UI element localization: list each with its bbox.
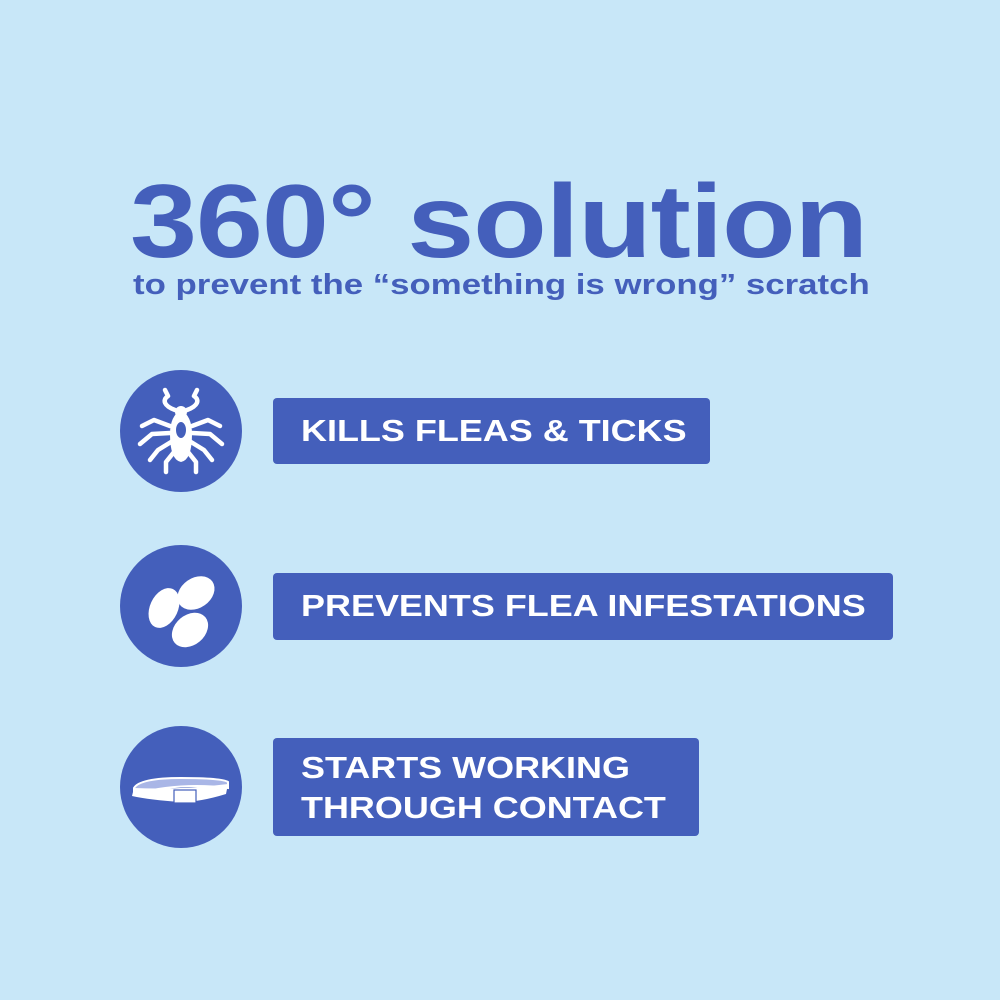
label: prevents: [273, 573, 893, 640]
label: starts working: THROUGH CONTACT: [301, 790, 666, 825]
title: 360° solution: [130, 164, 867, 280]
icon: collar: [120, 726, 242, 848]
label: prevents: PREVENTS FLEA INFESTATIONS: [301, 588, 866, 623]
icon: tick: [120, 370, 242, 492]
icon: eggs: [120, 545, 242, 667]
label: kills fleas: [273, 398, 710, 464]
subtitle: to prevent the “something is wrong” scratch: [133, 269, 870, 301]
label: kills fleas: KILLS FLEAS & TICKS: [301, 413, 687, 448]
label: starts working: STARTS WORKING: [301, 750, 630, 785]
label: starts working: [273, 738, 699, 836]
